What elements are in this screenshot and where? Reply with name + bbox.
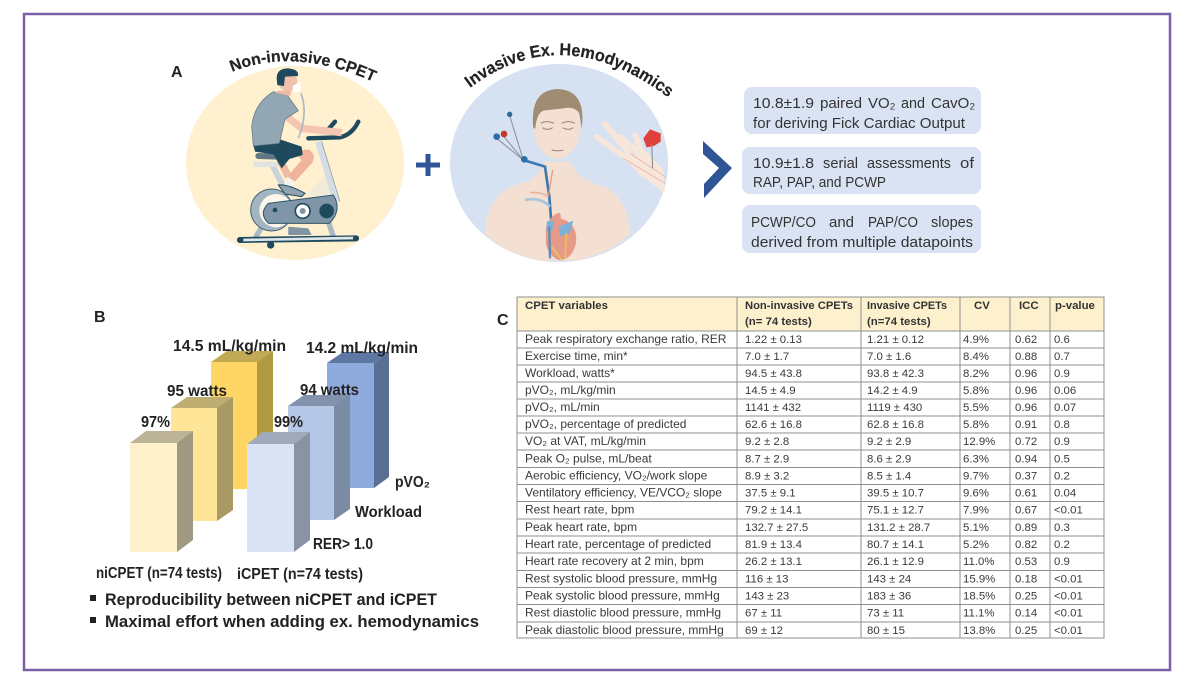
row: VO2 at VAT: 0.9 [1054, 436, 1070, 448]
row: rest diastolic: 0.14 [1015, 608, 1037, 620]
panel: non-invasive CPET [186, 50, 404, 260]
bullet list: takeaways [90, 590, 479, 631]
row: O2 pulse: Peak O₂ pulse, mL/beat [525, 452, 652, 466]
callout: slopes: and [829, 214, 854, 231]
row: RER: 0.6 [1054, 334, 1070, 346]
row: aerobic efficiency: 0.37 [1015, 470, 1037, 482]
value labels: 14.2 mL/kg/min [306, 340, 418, 357]
row: peak systolic: 143 ± 23 [745, 590, 789, 602]
row: aerobic efficiency [525, 468, 1070, 482]
callout: slopes: PCWP/CO [751, 214, 816, 231]
row: workload: 93.8 ± 42.3 [867, 368, 924, 380]
arrow: chevron [703, 141, 732, 198]
row: pVO2 per kg: 0.06 [1054, 385, 1076, 397]
row: rest heart rate [525, 502, 1083, 516]
row: VO2 at VAT: 9.2 ± 2.9 [867, 436, 911, 448]
row: peak heart rate: 132.7 ± 27.5 [745, 522, 808, 534]
table: CPET variables [517, 297, 1104, 638]
bar: iCPET RER [247, 432, 310, 552]
icon circle: cream background [186, 66, 404, 260]
callout: paired VO2 and CavO2: CavO₂ [931, 95, 975, 112]
row: pVO2 predicted: 0.8 [1054, 419, 1070, 431]
row: exercise time: 0.88 [1015, 351, 1037, 363]
row: heart rate predicted: 80.7 ± 14.1 [867, 539, 924, 551]
row: pVO2 per kg: 14.2 ± 4.9 [867, 385, 918, 397]
callout: paired VO2 and CavO2: VO₂ [868, 95, 896, 112]
row: peak diastolic: 13.8% [963, 625, 995, 637]
row: pVO2 predicted: pVO₂, percentage of predicted [525, 417, 686, 431]
callout: serial assessments: serial [823, 155, 858, 172]
row: pVO2: 0.07 [1054, 402, 1076, 414]
row: O2 pulse: 0.94 [1015, 454, 1037, 466]
row: peak heart rate: Peak heart rate, bpm [525, 520, 637, 534]
callout: slopes: slopes [931, 214, 973, 231]
callout: slopes: derived from multiple datapoints [751, 234, 973, 251]
value labels: 14.5 mL/kg/min [173, 338, 286, 355]
row: pVO2: 1141 ± 432 [745, 402, 801, 414]
row: O2 pulse: 8.6 ± 2.9 [867, 454, 911, 466]
row: aerobic efficiency: 8.5 ± 1.4 [867, 470, 911, 482]
heading: Invasive Ex. Hemodynamics: Invasive Ex. Hemodynamics [464, 43, 672, 96]
row: aerobic efficiency: Aerobic efficiency, VO₂/work slope [525, 468, 708, 482]
row: ventilatory efficiency: 39.5 ± 10.7 [867, 488, 924, 500]
row: exercise time: 7.0 ± 1.7 [745, 351, 789, 363]
row: peak systolic: 183 ± 36 [867, 590, 911, 602]
row: peak heart rate: 5.1% [963, 522, 989, 534]
icon: patient torso with catheter, heart and wrist [485, 89, 665, 261]
row: heart rate recovery: 0.53 [1015, 556, 1037, 568]
row: peak systolic: Peak systolic blood pressure, mmHg [525, 588, 720, 602]
callout: paired VO2 and CavO2: and [901, 95, 925, 112]
row: workload [525, 366, 1070, 380]
row: O2 pulse [525, 452, 1070, 466]
row: peak heart rate: 0.3 [1054, 522, 1070, 534]
row: rest heart rate: 7.9% [963, 504, 989, 516]
row: pVO2 per kg: 14.5 ± 4.9 [745, 385, 796, 397]
row: heart rate predicted: 0.2 [1054, 539, 1070, 551]
row: rest systolic: 143 ± 24 [867, 574, 911, 586]
callout: paired VO2 and CavO2: for deriving Fick Cardiac Output [753, 115, 966, 132]
callout: paired VO2 and CavO2: 10.8±1.9 [753, 95, 814, 112]
row: heart rate predicted: Heart rate, percentage of predicted [525, 537, 711, 551]
bar: iCPET pVO2 [327, 352, 389, 488]
row: pVO2 per kg: 5.8% [963, 385, 989, 397]
axis labels: RER> 1.0 [313, 536, 373, 553]
row: exercise time [525, 349, 1070, 363]
axis labels: niCPET (n=74 tests) [96, 565, 222, 582]
row: pVO2 per kg: pVO₂, mL/kg/min [525, 383, 616, 397]
row: heart rate recovery: 11.0% [963, 556, 994, 568]
row: rest systolic: <0.01 [1054, 574, 1083, 586]
bullet list: takeaways: Reproducibility between niCPET and iCPET [105, 590, 438, 609]
row: heart rate recovery: 26.2 ± 13.1 [745, 556, 802, 568]
bar: niCPET RER [130, 431, 193, 552]
row: pVO2 predicted: 62.6 ± 16.8 [745, 419, 802, 431]
table header: Non-invasive CPETs [745, 300, 853, 312]
bar: iCPET workload [288, 395, 350, 520]
row: peak heart rate [525, 520, 1070, 534]
row: VO2 at VAT: 0.72 [1015, 436, 1037, 448]
row: RER: 0.62 [1015, 334, 1037, 346]
row: pVO2 [525, 400, 1076, 414]
row: rest systolic: Rest systolic blood pressure, mmHg [525, 572, 717, 586]
row: workload: 8.2% [963, 368, 989, 380]
row: O2 pulse: 0.5 [1054, 454, 1070, 466]
axis labels: iCPET (n=74 tests) [237, 566, 363, 583]
row: pVO2 predicted: 0.91 [1015, 419, 1037, 431]
row: heart rate predicted: 0.82 [1015, 539, 1037, 551]
row: pVO2: 5.5% [963, 402, 989, 414]
bar: niCPET pVO2 [211, 351, 273, 489]
value labels: 99% [274, 414, 303, 431]
callout: slopes [742, 205, 981, 253]
bullet list: takeaways: Maximal effort when adding ex. hemodynamics [105, 612, 479, 631]
table header: CV [974, 300, 990, 312]
row: peak diastolic: 69 ± 12 [745, 625, 783, 637]
row: VO2 at VAT [525, 434, 1070, 448]
row: VO2 at VAT: VO₂ at VAT, mL/kg/min [525, 434, 646, 448]
row: exercise time: 7.0 ± 1.6 [867, 351, 911, 363]
row: rest systolic: 0.18 [1015, 574, 1037, 586]
row: rest diastolic [525, 606, 1083, 620]
row: pVO2 predicted [525, 417, 1070, 431]
row: RER: Peak respiratory exchange ratio, RER [525, 332, 727, 346]
heading: Non-invasive CPET: Non-invasive CPET [229, 50, 378, 80]
row: peak diastolic: <0.01 [1054, 625, 1083, 637]
row: heart rate recovery: 26.1 ± 12.9 [867, 556, 924, 568]
row: heart rate recovery: Heart rate recovery at 2 min, bpm [525, 554, 704, 568]
callout: serial assessments [742, 147, 981, 194]
row: rest systolic [525, 572, 1083, 586]
table header: (n=74 tests) [867, 316, 931, 328]
panel: invasive exercise hemodynamics [450, 43, 672, 262]
callout: serial assessments: RAP, PAP, and PCWP [753, 174, 886, 191]
row: ventilatory efficiency: 0.61 [1015, 488, 1037, 500]
row: rest heart rate: Rest heart rate, bpm [525, 502, 634, 516]
row: aerobic efficiency: 0.2 [1054, 470, 1070, 482]
row: exercise time: 0.7 [1054, 351, 1070, 363]
table header: CPET variables [525, 300, 608, 312]
row: aerobic efficiency: 9.7% [963, 470, 989, 482]
row: rest heart rate: <0.01 [1054, 504, 1083, 516]
axis labels: Workload [355, 504, 422, 521]
row: rest systolic: 116 ± 13 [745, 574, 788, 586]
panel: 3D bar chart [96, 338, 430, 583]
row: exercise time: Exercise time, min* [525, 349, 628, 363]
row: ventilatory efficiency: 0.04 [1054, 488, 1076, 500]
row: rest heart rate: 0.67 [1015, 504, 1037, 516]
panel label: C: C [497, 312, 509, 329]
row: workload: 0.9 [1054, 368, 1070, 380]
table header [517, 297, 1104, 331]
panel label: A: A [171, 64, 183, 81]
row: rest heart rate: 79.2 ± 14.1 [745, 504, 802, 516]
row: pVO2 predicted: 5.8% [963, 419, 989, 431]
row: rest diastolic: Rest diastolic blood pressure, mmHg [525, 606, 721, 620]
table header: Invasive CPETs [867, 300, 947, 312]
callout: serial assessments: assessments [867, 155, 951, 172]
row: RER: 4.9% [963, 334, 989, 346]
row: ventilatory efficiency: 37.5 ± 9.1 [745, 488, 796, 500]
callout: paired VO2 and CavO2 [744, 87, 981, 134]
row: peak systolic: 18.5% [963, 590, 995, 602]
value labels: 94 watts [300, 382, 359, 399]
row: rest diastolic: 11.1% [963, 608, 994, 620]
row: heart rate predicted: 81.9 ± 13.4 [745, 539, 802, 551]
row: pVO2 predicted: 62.8 ± 16.8 [867, 419, 924, 431]
row: VO2 at VAT: 12.9% [963, 436, 995, 448]
value labels: 95 watts [167, 383, 227, 400]
axis labels [96, 474, 430, 583]
bar: niCPET workload [171, 397, 233, 521]
table header: (n= 74 tests) [745, 316, 812, 328]
row: workload: 94.5 ± 43.8 [745, 368, 802, 380]
row: pVO2: 1119 ± 430 [867, 402, 922, 414]
row: rest diastolic: <0.01 [1054, 608, 1083, 620]
value labels: 97% [141, 414, 170, 431]
row: aerobic efficiency: 8.9 ± 3.2 [745, 470, 789, 482]
row: heart rate recovery: 0.9 [1054, 556, 1070, 568]
icon: person on exercise bike [237, 68, 359, 249]
row: peak heart rate: 0.89 [1015, 522, 1037, 534]
row: VO2 at VAT: 9.2 ± 2.8 [745, 436, 789, 448]
row: pVO2 per kg [525, 383, 1076, 397]
table grid [517, 297, 1104, 638]
row: peak heart rate: 131.2 ± 28.7 [867, 522, 930, 534]
row: peak diastolic: 80 ± 15 [867, 625, 905, 637]
row: peak systolic: <0.01 [1054, 590, 1083, 602]
table header: p-value [1055, 300, 1095, 312]
row: O2 pulse: 6.3% [963, 454, 989, 466]
row: RER [525, 332, 1070, 346]
value labels [141, 338, 418, 431]
table header: ICC [1019, 300, 1039, 312]
callout: serial assessments: of [960, 155, 975, 172]
row: ventilatory efficiency: 9.6% [963, 488, 989, 500]
row: heart rate predicted: 5.2% [963, 539, 989, 551]
row: pVO2 per kg: 0.96 [1015, 385, 1037, 397]
row: rest heart rate: 75.1 ± 12.7 [867, 504, 924, 516]
callout: slopes: PAP/CO [868, 214, 918, 231]
callout: paired VO2 and CavO2: paired [820, 95, 862, 112]
row: rest diastolic: 73 ± 11 [867, 608, 904, 620]
row: exercise time: 8.4% [963, 351, 989, 363]
row: ventilatory efficiency [525, 486, 1076, 500]
row: ventilatory efficiency: Ventilatory efficiency, VE/VCO₂ slope [525, 486, 722, 500]
plus sign [416, 154, 440, 176]
row: peak diastolic: 0.25 [1015, 625, 1037, 637]
callouts: procedures [742, 87, 981, 253]
row: pVO2: pVO₂, mL/min [525, 400, 600, 414]
row: peak diastolic [525, 623, 1083, 637]
row: rest diastolic: 67 ± 11 [745, 608, 782, 620]
row: RER: 1.22 ± 0.13 [745, 334, 802, 346]
axis labels: pVO₂ [395, 474, 430, 491]
row: rest systolic: 15.9% [963, 574, 995, 586]
row: pVO2: 0.96 [1015, 402, 1037, 414]
row: peak systolic: 0.25 [1015, 590, 1037, 602]
panel label: B: B [94, 309, 106, 326]
icon circle: blue background [450, 64, 668, 262]
row: heart rate recovery [525, 554, 1070, 568]
row: workload: Workload, watts* [525, 366, 615, 380]
callout: serial assessments: 10.9±1.8 [753, 155, 814, 172]
row: RER: 1.21 ± 0.12 [867, 334, 924, 346]
row: heart rate predicted [525, 537, 1070, 551]
row: peak diastolic: Peak diastolic blood pressure, mmHg [525, 623, 724, 637]
row: O2 pulse: 8.7 ± 2.9 [745, 454, 789, 466]
row: workload: 0.96 [1015, 368, 1037, 380]
row: peak systolic [525, 588, 1083, 602]
